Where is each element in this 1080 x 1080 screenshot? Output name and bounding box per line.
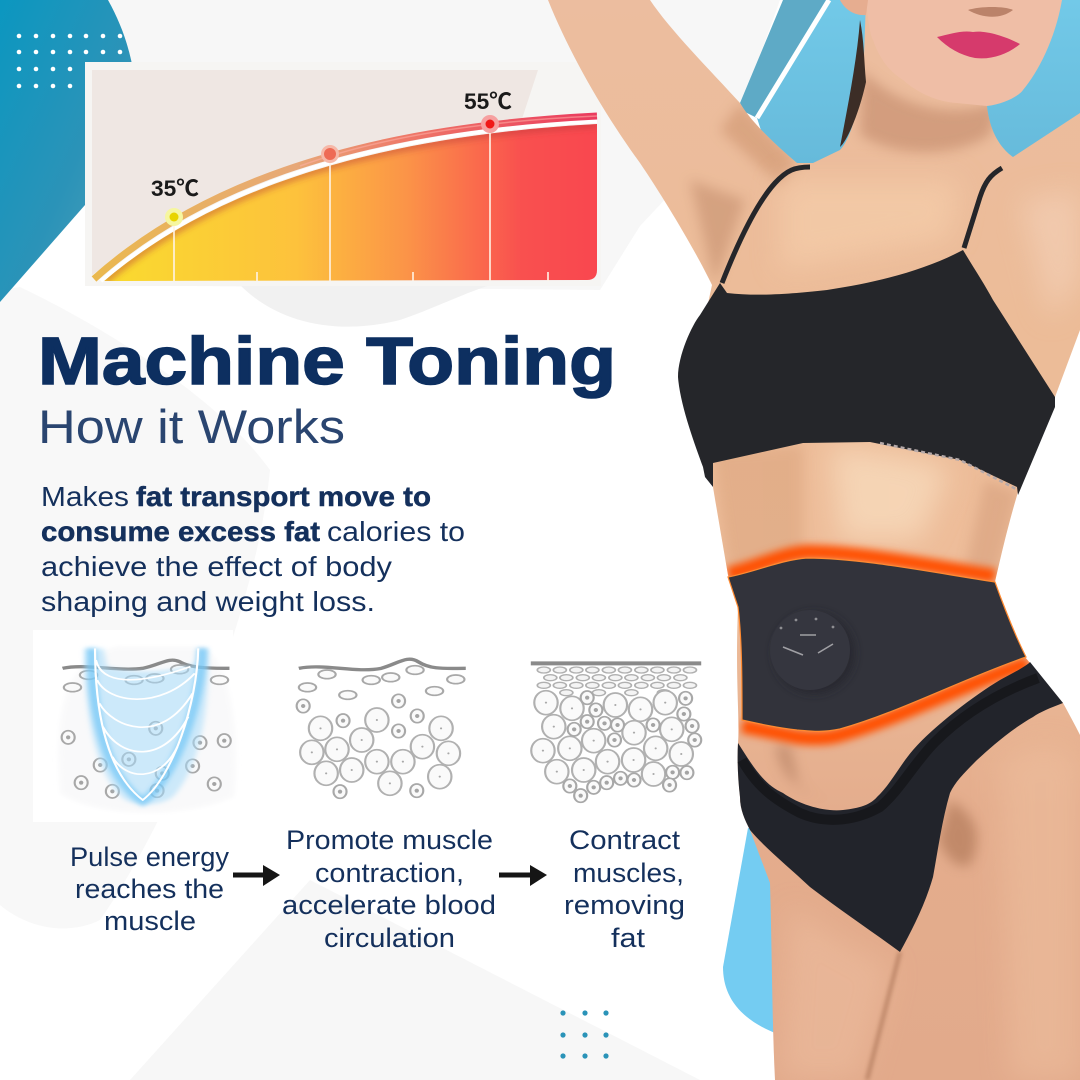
- marker mid: [321, 145, 339, 163]
- marker 35C: [165, 208, 183, 226]
- caption 1: reaches the: [75, 874, 224, 904]
- body paragraph: consume excess fat: [41, 516, 320, 547]
- body: [548, 0, 1080, 1080]
- waist glow: [728, 552, 1028, 738]
- body paragraph: achieve the effect of body: [41, 551, 392, 582]
- caption 1: [70, 842, 229, 936]
- blue background shape right: [740, 0, 1080, 220]
- caption 1: muscle: [104, 906, 196, 936]
- teal corner shape: [0, 0, 134, 302]
- nose shadow: [968, 7, 1013, 17]
- caption 2: [282, 825, 496, 953]
- abdominal belt: [728, 558, 1026, 731]
- body paragraph: fat transport move to: [136, 481, 431, 512]
- ear: [840, 0, 868, 15]
- marker 55C: [481, 115, 499, 133]
- blue pulse field: [84, 648, 208, 804]
- subheading: How it Works: [38, 400, 345, 453]
- caption 1: Pulse energy: [70, 842, 229, 872]
- body paragraph: Makes: [41, 481, 129, 512]
- body shading: [690, 70, 1080, 1080]
- caption 3: removing: [564, 890, 685, 920]
- caption 2: accelerate blood: [282, 890, 496, 920]
- arrow 2: [499, 865, 547, 886]
- caption 2: Promote muscle: [286, 825, 493, 855]
- body paragraph: [41, 481, 465, 617]
- label 55C: 55℃: [464, 89, 512, 114]
- caption 3: [564, 825, 685, 953]
- caption 2: contraction,: [315, 858, 464, 888]
- tissue diagrams: [33, 630, 701, 822]
- body paragraph: calories to: [327, 516, 465, 547]
- caption 3: fat: [611, 923, 646, 953]
- dot grid bottom: [560, 1010, 609, 1059]
- bra hem: [880, 443, 1016, 489]
- heading: Machine Toning: [38, 324, 616, 399]
- caption 3: muscles,: [573, 858, 684, 888]
- bra straps: [722, 167, 1002, 283]
- model figure: [548, 0, 1080, 1080]
- panties: [738, 662, 1063, 952]
- dot grid top left: [17, 34, 122, 88]
- hair: [840, 20, 866, 147]
- diagram 1: pulse energy: [59, 647, 236, 813]
- diagram 2: muscle contraction: [297, 659, 466, 798]
- grid lines: [174, 126, 548, 281]
- sports bra: [678, 250, 1055, 495]
- body paragraph: shaping and weight loss.: [41, 586, 375, 617]
- label 35C: 35℃: [151, 176, 199, 201]
- temperature chart panel: [85, 62, 601, 286]
- face: [866, 0, 1062, 106]
- heat fill: [104, 124, 597, 281]
- arrow 1: [233, 865, 280, 886]
- caption 3: Contract: [569, 825, 681, 855]
- caption 2: circulation: [324, 923, 455, 953]
- belt disc: [770, 610, 855, 694]
- curve band: [101, 121, 597, 281]
- blue lower shape: [723, 828, 800, 1033]
- lips: [937, 31, 1020, 58]
- diagram 3: contracted muscles: [531, 663, 701, 802]
